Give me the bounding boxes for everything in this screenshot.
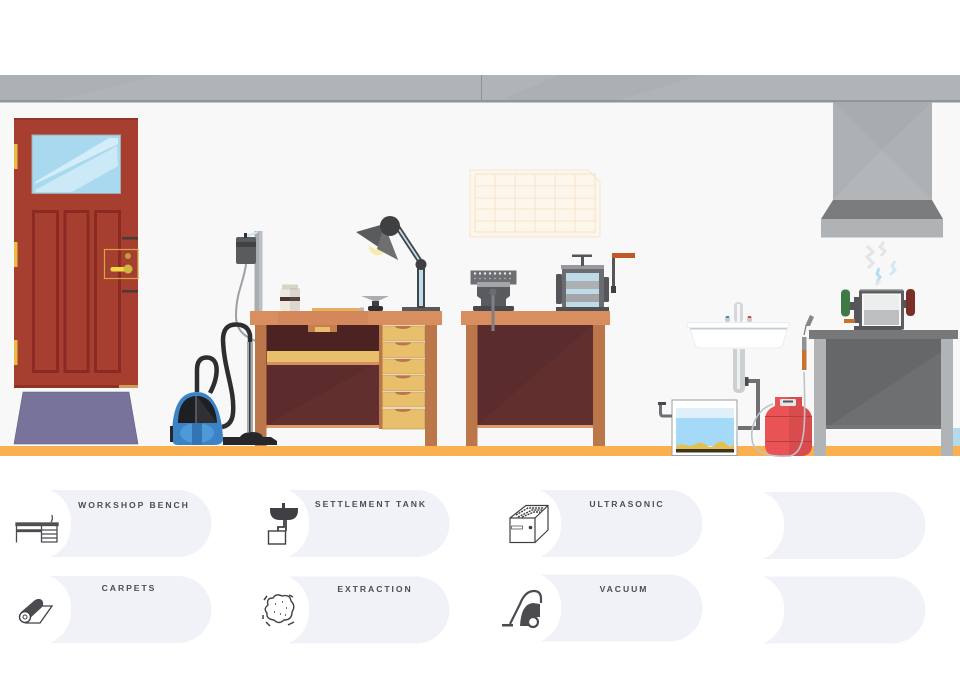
door hinges: [14, 144, 18, 365]
legend card: extraction: EXTRACTION: [337, 584, 413, 594]
rising fumes: [867, 242, 895, 285]
extraction hood: [821, 102, 943, 238]
bench legs: [466, 325, 478, 446]
bench top: [461, 311, 610, 325]
vacuum wand: [247, 342, 253, 432]
legend card: carpets: CARPETS: [102, 583, 156, 593]
jar: [280, 284, 300, 311]
legend card: workshop bench: WORKSHOP BENCH: [78, 500, 190, 510]
vacuum body: [172, 392, 223, 445]
torch handle: [802, 337, 806, 350]
floor: [0, 446, 960, 456]
vacuum hose: [222, 324, 250, 427]
sink: [687, 302, 789, 428]
door: [14, 118, 138, 388]
bench cavity: [266, 325, 379, 425]
legend card: carpets: [20, 576, 212, 643]
legend card: ultrasonic: [510, 490, 702, 557]
bench grinder: [841, 289, 915, 330]
ruler on bench: [312, 308, 364, 311]
legend card: vacuum: [502, 574, 702, 642]
sink basin: [690, 329, 787, 348]
bench cavity: [477, 325, 593, 425]
bench drawers: [382, 326, 424, 429]
legend card: workshop bench: [16, 490, 212, 557]
legend card: blank bottom right: [763, 576, 925, 644]
icon: vacuum cleaner: [502, 591, 541, 627]
drawer handles: [395, 326, 411, 412]
torch hose: [752, 372, 805, 456]
desk lamp: [356, 216, 440, 311]
right metal bench: [809, 330, 958, 456]
icon: sink and tank: [268, 503, 298, 544]
icon: ultrasonic cleaner: [510, 506, 548, 542]
wall poster: [470, 170, 600, 237]
sink trap pipe: [733, 349, 745, 393]
ceiling beam: [0, 75, 960, 102]
flex shaft motor stand: [236, 231, 300, 351]
workbench centre: [461, 311, 610, 446]
bench pull-out tray: [267, 325, 379, 365]
gas bottle and torch: [752, 315, 814, 456]
legend card: settlement tank: [268, 490, 450, 557]
wall: [0, 102, 960, 446]
legend card: ultrasonic: ULTRASONIC: [589, 499, 665, 509]
small blue item at edge: [953, 428, 960, 446]
icon: workbench: [16, 515, 58, 542]
workbench left: [250, 311, 442, 446]
legend card: blank top right: [763, 492, 926, 559]
bench vise: [470, 270, 516, 331]
anvil: [361, 296, 389, 311]
legend card: vacuum: VACUUM: [600, 584, 648, 594]
vacuum head: [223, 432, 277, 445]
door panels: [34, 212, 120, 372]
icon: dust cloud: [263, 595, 294, 626]
sink tap: [725, 302, 752, 323]
waste pipe: [738, 381, 758, 428]
icon: rolled carpet: [20, 599, 52, 623]
settlement tank: [658, 400, 737, 456]
rolling mill: [556, 253, 635, 311]
door mat: [14, 392, 138, 444]
bench top: [250, 311, 442, 325]
legend card: settlement tank: SETTLEMENT TANK: [315, 499, 427, 509]
legend card: extraction: [263, 576, 449, 644]
bench legs: [255, 325, 437, 446]
door handle: [104, 237, 138, 292]
door window: [32, 135, 120, 194]
vacuum cleaner: [170, 324, 277, 445]
